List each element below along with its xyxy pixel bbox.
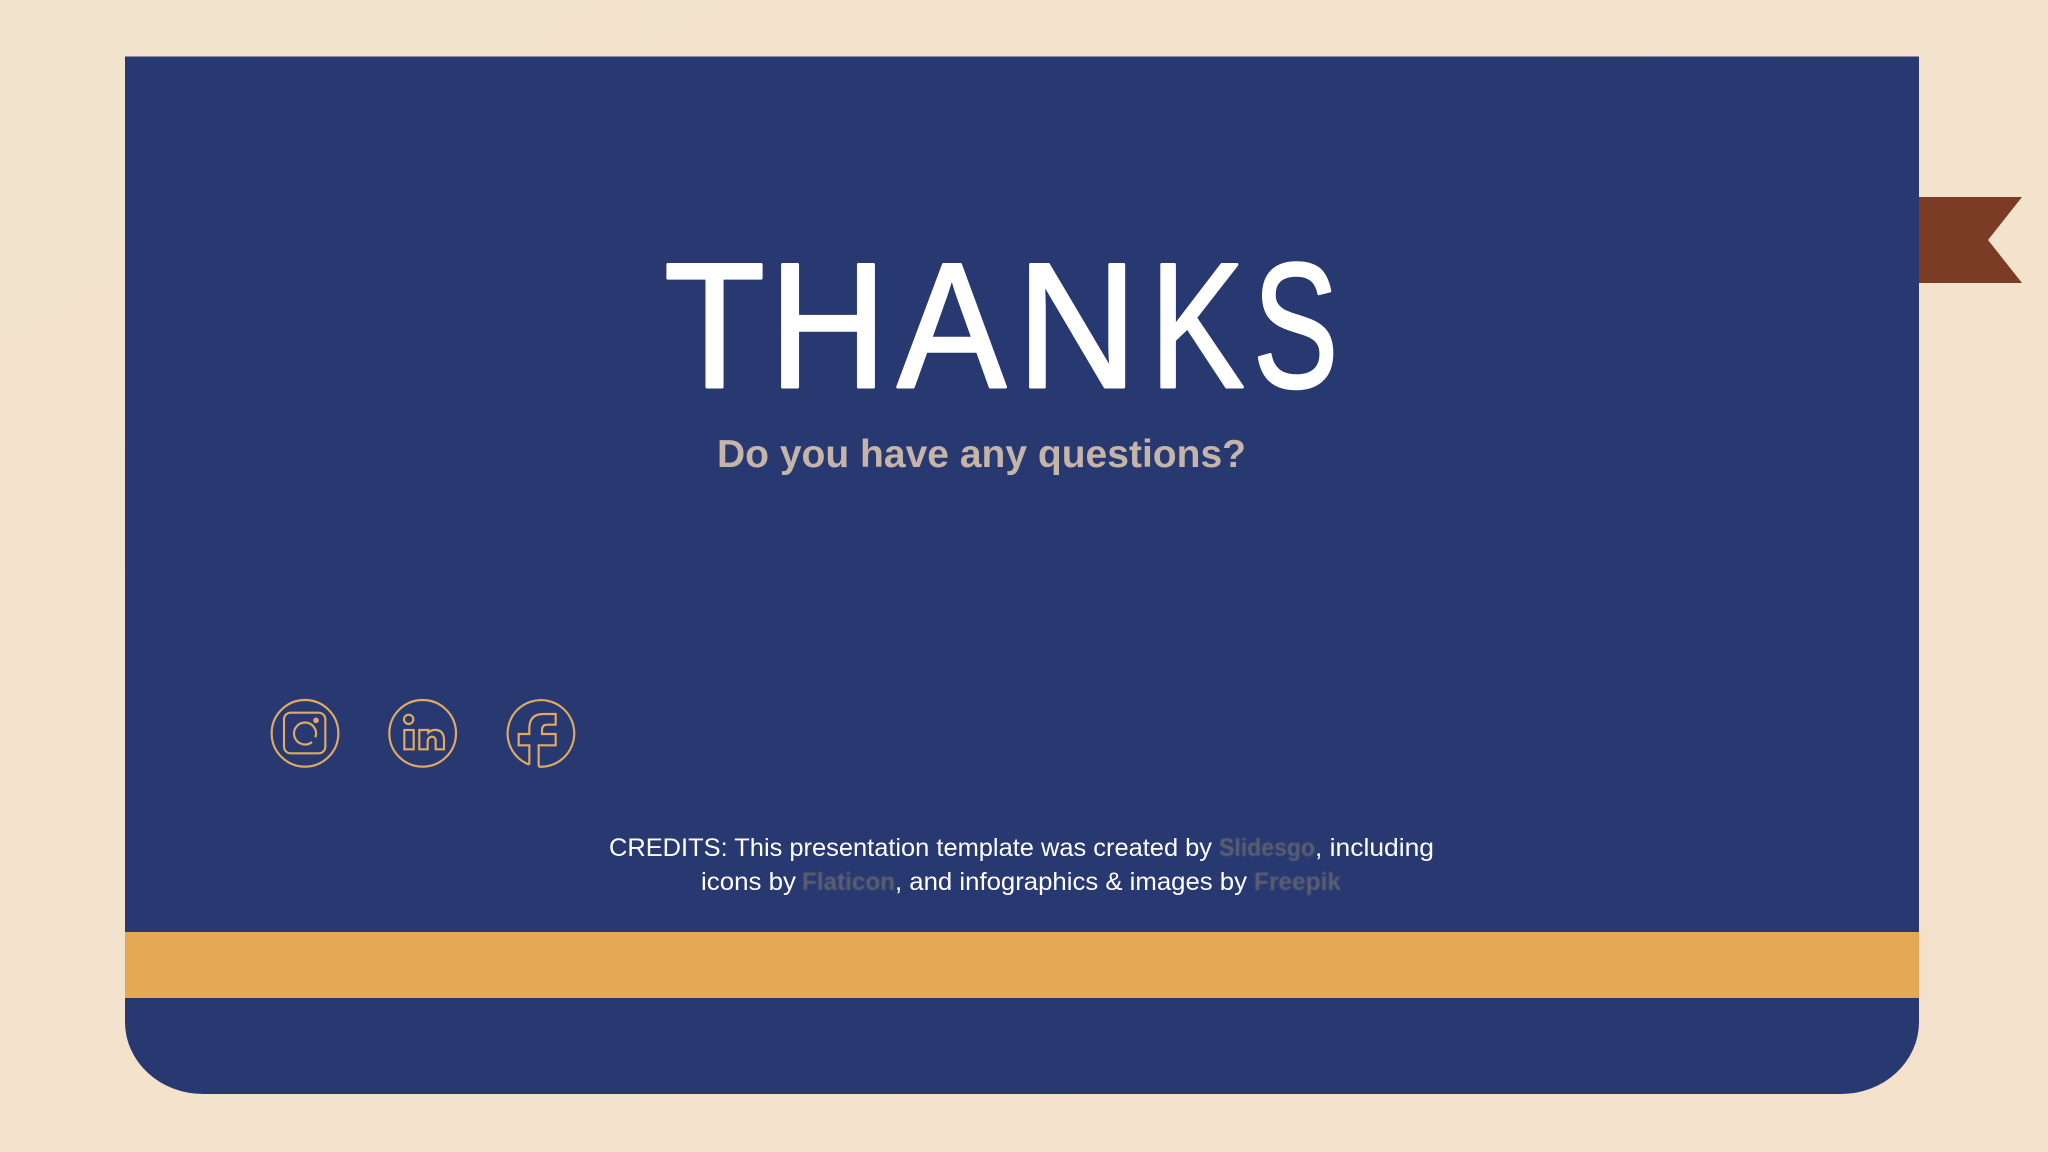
credits line 2: icons by	[701, 868, 797, 896]
accent band	[125, 932, 1919, 998]
icon: linkedin	[389, 700, 456, 767]
credits line 2: Flaticon	[802, 868, 895, 896]
icon: facebook	[508, 700, 574, 767]
subtitle: Do you have any questions?	[717, 433, 1246, 476]
credits line 1: Slidesgo	[1219, 834, 1315, 862]
title: S	[1253, 226, 1338, 425]
title: N	[1017, 226, 1137, 425]
credits line 2: , and infographics & images by	[895, 868, 1248, 896]
title: A	[897, 227, 1006, 426]
credits line 1: , including	[1315, 834, 1434, 862]
credits line 2: Freepik	[1254, 868, 1341, 896]
credits line 1: CREDITS: This presentation template was created by	[609, 834, 1213, 862]
social icons	[272, 700, 574, 767]
credits line 2	[701, 868, 1341, 896]
navy panel	[125, 56, 1919, 1094]
title: H	[769, 226, 887, 426]
title: K	[1150, 226, 1244, 426]
title: T	[664, 227, 765, 425]
title	[664, 226, 1338, 426]
ribbon flag	[1918, 197, 2022, 283]
credits text	[609, 834, 1434, 896]
icon: instagram	[272, 700, 338, 767]
